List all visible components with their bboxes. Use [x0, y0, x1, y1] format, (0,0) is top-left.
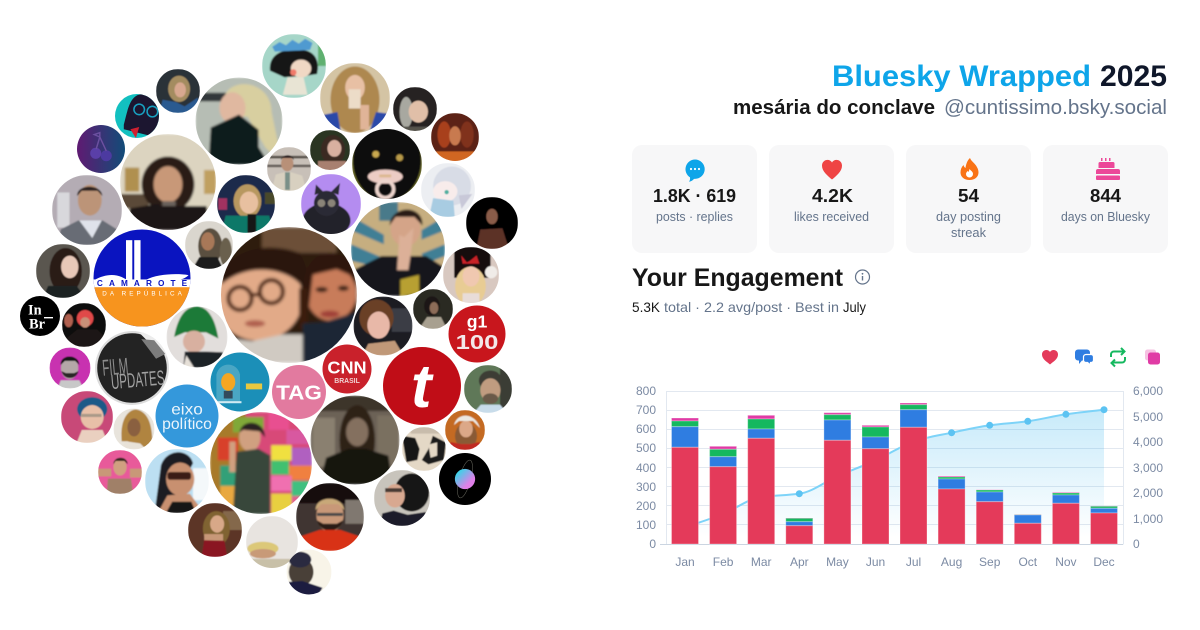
avatar: g1 logo: 100	[456, 331, 498, 354]
avatar: cat kiss drawing	[402, 427, 446, 471]
icon: chat bubble	[685, 160, 705, 182]
stat label: likes received	[794, 210, 869, 224]
month labels: Nov	[1055, 555, 1077, 569]
avatar: cherry icon	[77, 125, 125, 173]
avatar: CNN Brasil logo	[322, 344, 372, 394]
avatar: woman in green at party	[217, 175, 275, 233]
panel: likes received	[769, 145, 894, 253]
month labels: Dec	[1093, 555, 1115, 569]
avatar: blonde with black fur	[196, 78, 282, 164]
bar: Dec	[1090, 506, 1118, 544]
icon: likes	[1042, 350, 1058, 364]
bar: May	[824, 413, 851, 544]
avatar: anime elf	[421, 163, 475, 217]
bar: Jan	[672, 418, 698, 544]
avatar: InBr logo: Br	[29, 316, 46, 332]
icon: quotes	[1145, 350, 1160, 364]
right axis labels	[1133, 384, 1163, 551]
avatar: blue hair person	[61, 391, 113, 443]
avatar: person in green hat	[166, 306, 228, 368]
month labels: Jun	[866, 555, 885, 569]
avatar: woman in sunglasses	[145, 449, 209, 513]
avatar: office man	[267, 147, 311, 191]
engagement summary: July	[843, 299, 866, 315]
avatar: woman in glasses (selfie)	[120, 134, 216, 230]
panel: days on Bluesky	[1043, 145, 1168, 253]
month labels: Oct	[1018, 555, 1038, 569]
right axis labels: 3,000	[1133, 461, 1163, 475]
left axis labels: 700	[636, 403, 656, 417]
stat label: posts · replies	[656, 210, 733, 224]
subtitle: display name and handle: mesária do conclave	[733, 97, 935, 119]
icon: reposts	[1111, 348, 1125, 366]
avatar: man in dark	[466, 197, 518, 249]
right axis labels: 4,000	[1133, 435, 1163, 449]
avatar: t logo: t	[411, 352, 434, 421]
month labels: May	[826, 555, 849, 569]
right axis labels: 2,000	[1133, 486, 1163, 500]
left axis labels: 600	[636, 422, 656, 436]
heading: Your Engagement: Your Engagement	[632, 264, 844, 292]
bar: Jun	[862, 425, 889, 544]
avatar: woman with glasses and long hair	[185, 221, 233, 269]
avatar: eixo politico logo: político	[162, 416, 212, 433]
avatar: woman with curly hair	[374, 470, 430, 526]
title: 2025	[1100, 60, 1167, 93]
avatar: couple	[214, 227, 357, 363]
avatar: InBr logo: In	[28, 302, 42, 318]
chart legend	[1042, 348, 1160, 366]
month labels: Mar	[751, 555, 772, 569]
stat label	[936, 210, 1001, 240]
avatar: woman in red dress	[188, 503, 242, 557]
icon: info	[856, 270, 870, 284]
icon: flame	[960, 158, 978, 180]
stat value: 54	[958, 186, 979, 206]
avatar: cartoon girl	[262, 34, 326, 98]
bar: Nov	[1052, 492, 1079, 544]
avatar: g1 logo	[448, 306, 506, 362]
left axis labels: 200	[636, 499, 656, 513]
month labels: Jul	[906, 555, 921, 569]
avatar: TAG logo: TAG	[276, 382, 322, 405]
avatar: blonde with antlers	[443, 247, 499, 306]
bar: Oct	[1014, 514, 1041, 544]
left axis labels: 300	[636, 480, 656, 494]
chart gridlines	[660, 391, 1124, 544]
bar: Jul	[900, 403, 927, 544]
bar: Mar	[748, 415, 775, 544]
avatar: CNN Brasil logo: CNN	[327, 357, 367, 377]
avatar: InBr logo	[20, 296, 60, 336]
stat label: day posting	[936, 210, 1001, 224]
avatar: blonde with coffee	[320, 63, 390, 133]
avatar: red haired singer	[62, 303, 106, 347]
avatar: Film Updates logo: UPDATES	[110, 366, 165, 394]
avatar: man at colorful wall	[210, 412, 312, 514]
avatar: cat with glasses	[301, 174, 361, 238]
icon: heart	[822, 160, 842, 180]
avatar: woman in santa hat	[445, 410, 485, 450]
left axis labels: 800	[636, 384, 656, 398]
avatar: lightbulb illustration	[210, 352, 270, 412]
stat value: 844	[1090, 186, 1121, 206]
avatar: bearded man dark	[286, 550, 332, 596]
avatar: man with curly hair	[464, 365, 512, 413]
avatar: Film Updates logo	[95, 331, 169, 405]
subtitle: display name and handle: @cuntissimo.bsky.social	[944, 97, 1167, 119]
line points	[796, 406, 1108, 497]
bar: Apr	[786, 518, 813, 544]
avatar: eixo politico logo: eixo	[171, 401, 203, 418]
bar: Feb	[710, 446, 737, 544]
bar: Aug	[938, 476, 965, 544]
engagement chart	[636, 384, 1163, 569]
avatar: blonde lying down	[246, 516, 298, 569]
right axis labels: 1,000	[1133, 512, 1163, 526]
month labels	[675, 555, 1115, 569]
cumulative line	[685, 410, 1104, 527]
avatar: blond man in red	[296, 483, 364, 551]
panel: posts and replies	[632, 145, 757, 253]
avatar: man on pink	[98, 450, 142, 494]
right axis labels: 0	[1133, 537, 1140, 551]
avatar: woman with golden hair	[114, 408, 154, 450]
engagement summary: total · 2.2 avg/post · Best in	[664, 299, 839, 315]
month labels: Aug	[941, 555, 962, 569]
avatar: t logo	[383, 347, 461, 425]
avatar: small dark portrait	[413, 289, 453, 329]
avatar: girl with red hair	[354, 296, 412, 356]
left axis labels	[636, 384, 656, 551]
avatar: Uranus	[439, 453, 491, 505]
avatar: blonde in denim	[156, 69, 200, 113]
right axis labels: 5,000	[1133, 410, 1163, 424]
left axis labels: 100	[636, 518, 656, 532]
avatar: Camarote da Republica logo: CAMAROTE	[97, 279, 188, 288]
right axis labels: 6,000	[1133, 384, 1163, 398]
panel: day posting streak	[906, 145, 1031, 253]
avatar: man on magenta	[50, 348, 90, 388]
cumulative area	[685, 410, 1104, 544]
avatar: goth woman	[393, 87, 437, 133]
icon: replies	[1075, 350, 1094, 365]
avatar: black cat with pacifier	[352, 129, 422, 199]
avatar: CNN Brasil logo: BRASIL	[334, 378, 360, 385]
icon: cake	[1096, 158, 1120, 180]
avatar: dark haired woman	[36, 244, 90, 298]
avatar: eixo politico logo	[156, 384, 218, 448]
stat label: streak	[951, 226, 987, 240]
stacked bars	[672, 403, 1118, 544]
subtitle: display name and handle	[733, 97, 1167, 119]
avatar: TAG logo	[272, 365, 326, 419]
month labels: Jan	[675, 555, 695, 569]
avatar cluster	[20, 34, 518, 596]
avatar: girl in dark room	[310, 396, 400, 484]
avatar: Film Updates logo: FILM	[101, 353, 129, 381]
left axis labels: 500	[636, 441, 656, 455]
avatar: Camarote da Republica logo	[94, 230, 190, 328]
stat value: 1.8K · 619	[653, 186, 736, 206]
avatar: orange red painting	[431, 113, 479, 162]
month labels: Apr	[790, 555, 809, 569]
title: Bluesky Wrapped	[832, 60, 1091, 93]
month labels: Feb	[713, 555, 734, 569]
bar: Sep	[976, 490, 1003, 544]
month labels: Sep	[979, 555, 1001, 569]
left axis labels: 0	[649, 537, 656, 551]
stat label: days on Bluesky	[1061, 210, 1151, 224]
avatar: Vader with glasses	[115, 94, 159, 138]
avatar: man in grey sweater	[52, 175, 122, 245]
left axis labels: 400	[636, 461, 656, 475]
avatar: man with peace sign	[351, 202, 445, 296]
engagement summary: 5.3K	[632, 299, 661, 315]
stat value: 4.2K	[812, 186, 853, 206]
avatar: brunette on green	[310, 130, 350, 171]
avatar: g1 logo: g1	[467, 312, 487, 332]
avatar: Camarote da Republica logo: DA REPÚBLICA	[102, 288, 183, 297]
